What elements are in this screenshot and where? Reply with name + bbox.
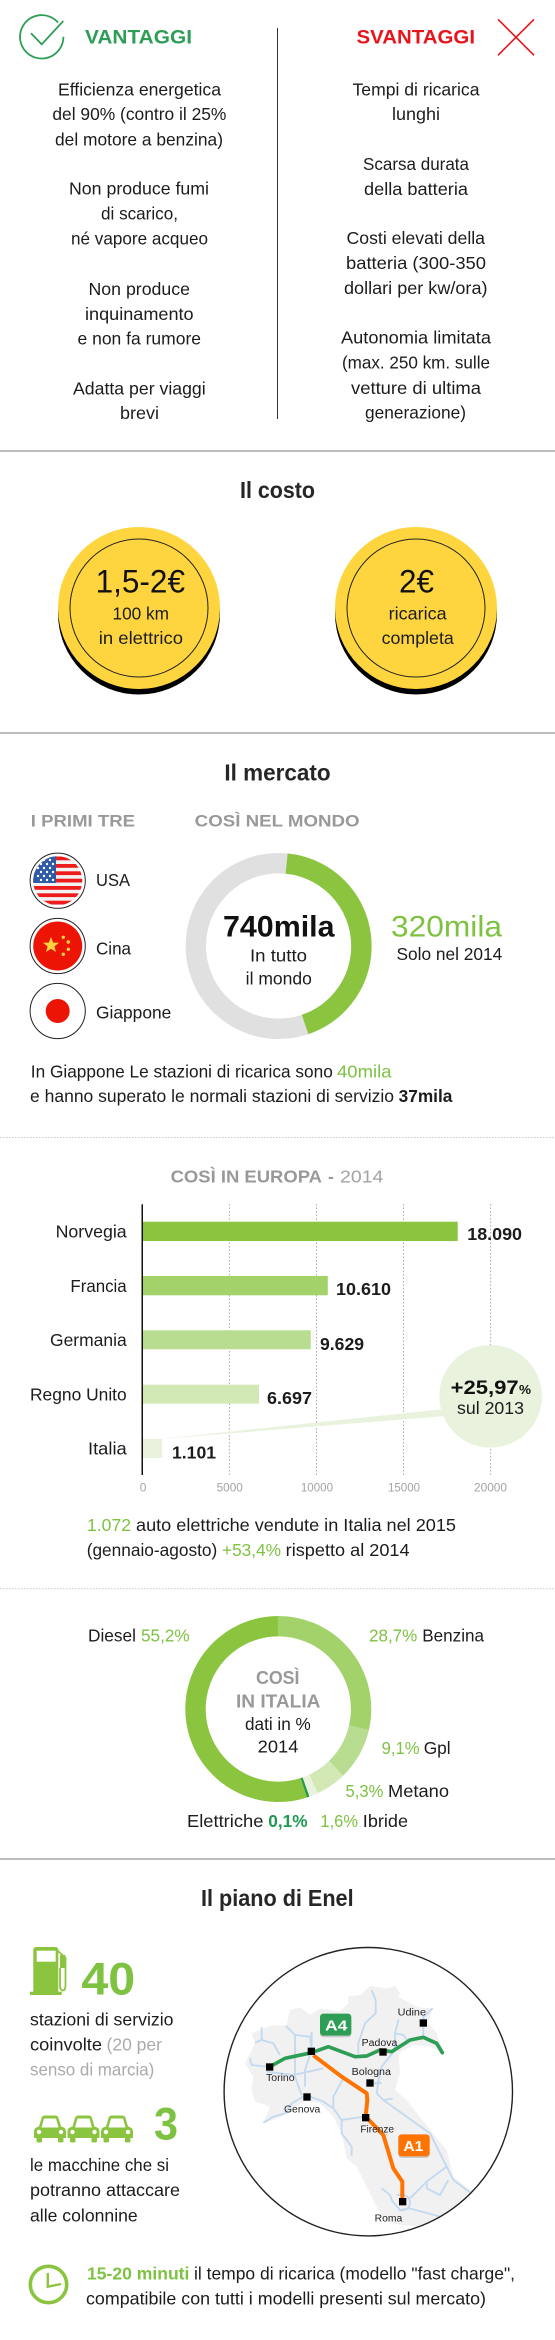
text: costi: Costi elevati della [346, 228, 485, 248]
coin: ricarica completa: 2€ [399, 563, 434, 599]
labels: countries [30, 1222, 127, 1458]
badge: a4 [320, 2014, 351, 2037]
labels: values: 9.629 [320, 1334, 364, 1354]
panel: il costo [58, 477, 497, 694]
text: fumi: Non produce fumi [69, 179, 209, 199]
route: a4 [270, 2037, 442, 2067]
labels: countries: Norvegia [56, 1222, 127, 1242]
label: giappone: Giappone [96, 1002, 171, 1022]
text: fumi: né vapore acqueo [71, 229, 208, 249]
map ring [224, 1948, 513, 2236]
labels: axis: 5000 [217, 1481, 243, 1495]
map: italy highways [224, 1948, 513, 2236]
labels: axis: 10000 [301, 1481, 333, 1495]
text: efficienza: del motore a benzina) [55, 129, 223, 149]
text: viaggi brevi [73, 378, 206, 423]
label: elettriche: 0,1% [268, 1811, 308, 1831]
text: costi: dollari per kw/ora) [344, 278, 488, 298]
text: efficienza [52, 79, 226, 149]
coin: ricarica completa: completa [382, 628, 454, 648]
icon: red cross [498, 19, 534, 55]
heading: il piano di enel: Il piano di Enel [201, 1885, 354, 1911]
heading: così in europa [171, 1165, 384, 1186]
text: stazioni coinvolte: senso di marcia) [30, 2060, 154, 2080]
label: ibride: Ibride [363, 1811, 408, 1831]
text: durata: della batteria [364, 179, 468, 199]
donut chart: mondo: il mondo [246, 968, 312, 988]
text: inquinamento: inquinamento [85, 304, 194, 324]
panel: così in europa [30, 1165, 542, 1560]
label: usa: USA [96, 870, 130, 890]
label: gpl: Gpl [424, 1738, 451, 1758]
text: auto vendute italia: 1.072 [87, 1515, 131, 1535]
text: tempi: lunghi [392, 104, 440, 124]
icon: fuel pump [30, 1947, 66, 1995]
text: stazioni coinvolte: coinvolte [30, 2035, 102, 2055]
heading: così nel mondo: COSÌ NEL MONDO [195, 812, 360, 831]
stat: 40: 40 [81, 1953, 135, 2004]
text: tempo di ricarica [86, 2263, 515, 2308]
text: tempo di ricarica: il tempo di ricarica (modello "fast charge", [194, 2263, 515, 2283]
coin: ricarica completa: ricarica [389, 603, 447, 623]
coin: 100 km: 1,5-2€ [96, 563, 185, 599]
label: benzina: Benzina [422, 1626, 484, 1646]
coin: 100 km: 100 km [112, 603, 169, 623]
panel: il piano di enel [30, 1885, 515, 2308]
stat: 320mila [391, 911, 503, 964]
donut chart: mondo: In tutto [250, 945, 307, 965]
icon: three cars [34, 2116, 133, 2142]
labels: values [172, 1224, 522, 1462]
callout: +25,97%: sul 2013 [457, 1398, 524, 1418]
text: giappone stazioni: In Giappone Le stazioni di ricarica sono [31, 1061, 333, 1081]
label: diesel: Diesel [88, 1626, 136, 1646]
label: ibride [320, 1811, 408, 1831]
label: gpl: 9,1% [382, 1738, 420, 1758]
label: metano: 5,3% [346, 1781, 383, 1801]
label: metano [346, 1781, 449, 1801]
label: benzina: 28,7% [369, 1626, 417, 1646]
text: donut center: dati in % [245, 1714, 311, 1734]
text: efficienza: Efficienza energetica [58, 79, 221, 99]
axis [142, 1204, 143, 1475]
heading: il costo: Il costo [240, 477, 315, 503]
label: diesel: 55,2% [141, 1626, 190, 1646]
label: gpl [382, 1738, 451, 1758]
labels: values: 18.090 [467, 1224, 522, 1244]
text: stazioni coinvolte: stazioni di servizio [30, 2010, 174, 2030]
badge: a4: A4 [325, 2018, 348, 2035]
labels: countries: Francia [70, 1276, 127, 1296]
city labels: Genova [284, 2105, 321, 2116]
labels: axis: 20000 [474, 1481, 507, 1495]
heading: così in europa: - [328, 1166, 334, 1186]
coin: 100 km: in elettrico [99, 628, 183, 648]
text: inquinamento: Non produce [88, 279, 190, 299]
text: autonomia: vetture di ultima [351, 378, 481, 398]
text: donut center: 2014 [258, 1737, 299, 1757]
text: efficienza: del 90% (contro il 25% [52, 104, 226, 124]
label: cina: Cina [96, 939, 131, 959]
text: tempo di ricarica: 15-20 minuti [87, 2263, 189, 2283]
text: autonomia: (max. 250 km. sulle [342, 353, 490, 373]
text: giappone stazioni: 40mila [337, 1061, 392, 1081]
label: metano: Metano [388, 1781, 449, 1801]
text: giappone stazioni: 37mila [399, 1086, 453, 1106]
text: fumi: di scarico, [101, 203, 178, 223]
heading: svantaggi: SVANTAGGI [356, 26, 475, 48]
text: auto vendute italia: +53,4% [222, 1540, 281, 1560]
bar: norvegia [142, 1222, 458, 1241]
text: macchine: alle colonnine [30, 2205, 138, 2225]
text: donut center [236, 1667, 320, 1757]
text: giappone stazioni: e hanno superato le normali stazioni di servizio [30, 1086, 394, 1106]
divider: vantaggi svantaggi [277, 28, 278, 419]
coin: 100 km [58, 527, 220, 694]
text: durata [363, 154, 469, 199]
text: autonomia [341, 328, 491, 423]
labels: countries: Germania [50, 1330, 127, 1350]
city labels: Torino [266, 2073, 295, 2084]
text: fumi [69, 179, 209, 249]
text: auto vendute italia: auto elettriche vendute in Italia nel 2015 [136, 1515, 456, 1535]
icon: flag cina [30, 918, 85, 974]
bar: francia [142, 1276, 328, 1295]
badge: a1: A1 [403, 2138, 423, 2155]
bar: germania [142, 1330, 311, 1349]
labels: axis: 0 [140, 1481, 147, 1495]
icon: flag usa [30, 853, 85, 908]
text: macchine [30, 2155, 180, 2225]
icon: flag giappone [30, 983, 85, 1039]
badge: a1 [398, 2134, 430, 2158]
text: tempi [352, 79, 480, 124]
label: ibride: 1,6% [320, 1811, 358, 1831]
stat: 3: 3 [154, 2098, 178, 2149]
heading: i primi tre: I PRIMI TRE [31, 812, 135, 831]
panel: così in italia [88, 1592, 484, 1831]
donut chart: mondo [188, 855, 370, 1037]
text: auto vendute italia [87, 1515, 456, 1560]
text: inquinamento [78, 279, 201, 349]
text: donut center: COSÌ [256, 1667, 300, 1688]
label: elettriche: Elettriche [187, 1811, 263, 1831]
city labels: Bologna [352, 2067, 391, 2078]
text: viaggi brevi: brevi [120, 403, 159, 423]
labels: countries: Italia [88, 1438, 127, 1458]
labels: values: 1.101 [172, 1442, 216, 1462]
text: durata: Scarsa durata [363, 154, 469, 174]
text: inquinamento: e non fa rumore [78, 329, 201, 349]
text: costi: batteria (300-350 [346, 253, 486, 273]
text: stazioni coinvolte [30, 2010, 174, 2080]
coin: ricarica completa [335, 527, 497, 694]
text: autonomia: Autonomia limitata [341, 328, 491, 348]
label: diesel [88, 1626, 190, 1646]
text: macchine: le macchine che si [30, 2155, 169, 2175]
stat: 320mila: 320mila [391, 911, 502, 944]
text: autonomia: generazione) [365, 403, 466, 423]
text: macchine: potranno attaccare [30, 2180, 180, 2200]
route: a1 [313, 2055, 402, 2202]
bar chart: europa [30, 1204, 522, 1495]
icon: clock [30, 2266, 67, 2303]
bar: italia [142, 1439, 162, 1458]
heading: vantaggi: VANTAGGI [85, 26, 192, 48]
panel: svantaggi [341, 19, 534, 423]
stat: 320mila: Solo nel 2014 [396, 944, 503, 964]
text: giappone stazioni [30, 1061, 453, 1106]
text: tempi: Tempi di ricarica [352, 79, 480, 99]
text: auto vendute italia: rispetto al 2014 [286, 1540, 410, 1560]
city labels: Padova [362, 2038, 398, 2049]
city labels: Udine [398, 2008, 426, 2019]
labels: countries: Regno Unito [30, 1384, 127, 1404]
road network [250, 1990, 473, 2217]
label: elettriche [187, 1811, 308, 1831]
labels: axis: 15000 [388, 1481, 420, 1495]
label: benzina [369, 1626, 484, 1646]
heading: il mercato: Il mercato [224, 760, 331, 786]
labels: values: 10.610 [336, 1279, 391, 1299]
text: tempo di ricarica: compatibile con tutti i modelli presenti sul mercato) [86, 2288, 486, 2308]
land: northern italy [245, 1986, 471, 2226]
city labels [266, 2008, 426, 2225]
callout: +25,97%: +25,97 [451, 1377, 519, 1399]
city labels: Roma [375, 2214, 403, 2225]
donut chart: mondo: 740mila [223, 911, 335, 944]
panel: il mercato [30, 760, 503, 1106]
text: stazioni coinvolte: (20 per [106, 2035, 162, 2055]
bar: regno unito [142, 1385, 259, 1404]
callout: +25,97%: % [519, 1382, 531, 1397]
callout: +25,97% [160, 1345, 542, 1448]
labels: axis [140, 1481, 507, 1495]
text: auto vendute italia: (gennaio-agosto) [87, 1540, 217, 1560]
donut chart: italia [161, 1592, 395, 1826]
text: costi [344, 228, 488, 298]
heading: così in europa: 2014 [340, 1166, 384, 1186]
city labels: Firenze [360, 2125, 394, 2136]
text: donut center: IN ITALIA [236, 1691, 320, 1711]
city markers [266, 2019, 427, 2205]
panel: vantaggi [20, 15, 226, 423]
heading: così in europa: COSÌ IN EUROPA [171, 1165, 322, 1186]
labels: values: 6.697 [267, 1388, 312, 1408]
text: viaggi brevi: Adatta per viaggi [73, 378, 206, 398]
icon: green check [20, 15, 63, 59]
